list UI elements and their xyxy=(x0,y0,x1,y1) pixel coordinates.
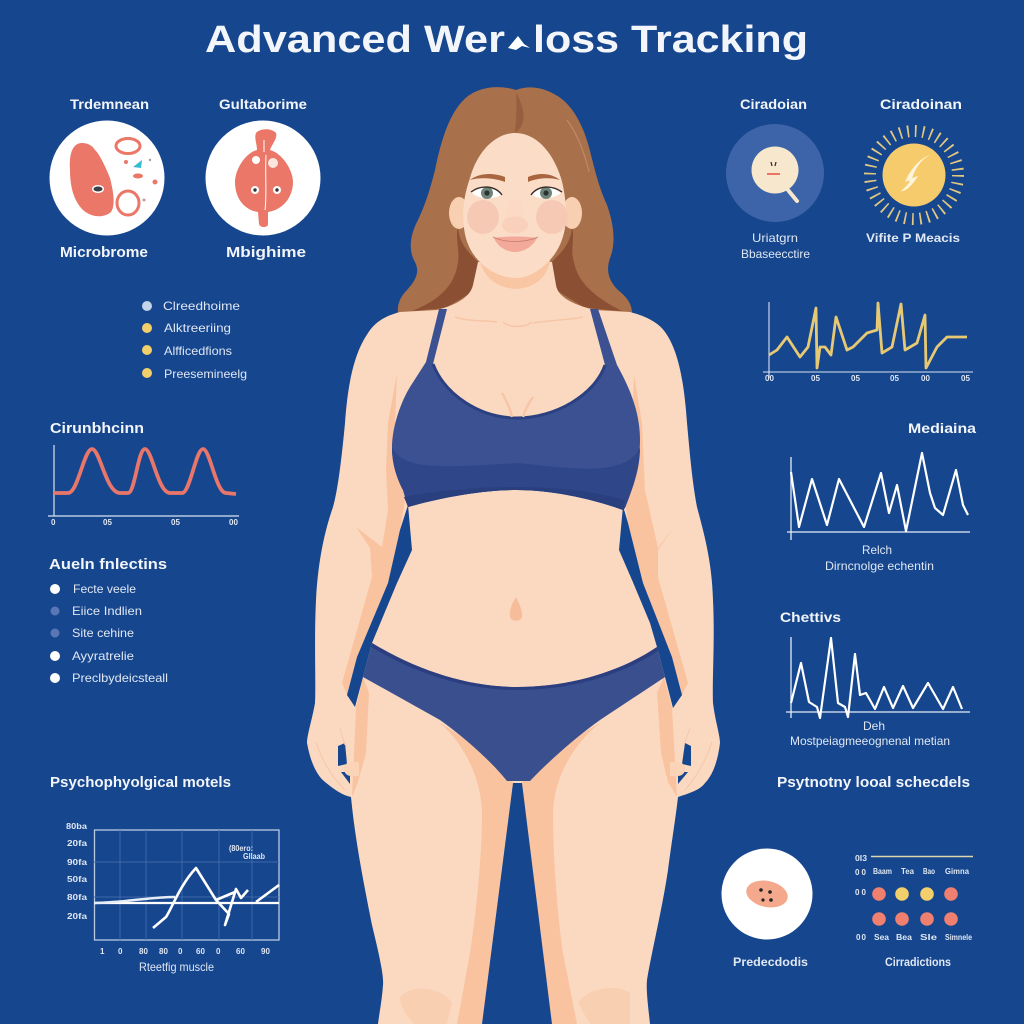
panel: Psychophyolgical motels chart: 0 xyxy=(178,947,183,956)
eyebrows xyxy=(470,174,505,182)
body silhouette xyxy=(307,262,720,1024)
arm shadow right xyxy=(625,375,688,695)
panel: Psychophyolgical motels chart: Gllaab xyxy=(243,852,265,861)
mouth xyxy=(494,236,537,252)
panel: yellow line chart: 05 xyxy=(851,374,860,383)
cheeks xyxy=(467,200,499,234)
schedule dot grid: Sle xyxy=(920,933,938,942)
legend list: Aueln fnlectins: Preclbydeicsteall xyxy=(72,671,168,685)
gap between right arm and torso xyxy=(619,506,682,708)
hand gaps xyxy=(338,743,691,784)
schedule dot grid: 00 xyxy=(855,888,867,897)
label: Uriatgrn: Uriatgrn xyxy=(752,231,798,245)
cleavage xyxy=(502,393,533,417)
legend list: Aueln fnlectins: Ayyratrelie xyxy=(72,649,134,663)
schedule dot grid: Sea xyxy=(874,933,890,942)
central figure xyxy=(307,87,720,1024)
label: Trdemnean: Trdemnean xyxy=(70,96,149,112)
panel: Psychophyolgical motels chart: 80fa xyxy=(67,893,88,902)
panel: Psychophyolgical motels chart: 20fa xyxy=(67,912,88,921)
schedule dot grid xyxy=(855,854,973,942)
legend list: Aueln fnlectins: Fecte veele xyxy=(73,582,136,596)
panel: Psychophyolgical motels chart: 80 xyxy=(139,947,148,956)
schedule dot grid: 00 xyxy=(856,933,867,942)
label: Ciradoian: Ciradoian xyxy=(740,96,807,112)
legend list: metabolic states: Alfficedfions xyxy=(164,344,232,358)
panel: Psytnotny looal schecdels xyxy=(722,774,973,969)
panel: Psychophyolgical motels chart: Psychophyolgical motels xyxy=(50,774,231,791)
panel: Cirunbhcinn wave chart xyxy=(48,421,239,527)
schedule dot grid: Bea xyxy=(896,933,913,942)
schedule dot grid: Simnele xyxy=(945,933,972,942)
panel: Psychophyolgical motels chart: 20fa xyxy=(67,839,88,848)
legend list: Aueln fnlectins: Eiice Indlien xyxy=(72,604,142,618)
gap between left arm and torso xyxy=(347,505,412,707)
thumbs xyxy=(344,762,685,776)
panel: yellow line chart xyxy=(763,302,973,383)
panel: Psychophyolgical motels chart xyxy=(50,774,279,974)
label: Ciradoinan: Ciradoinan xyxy=(880,96,962,112)
panel: Mediaina chart: Relch xyxy=(862,543,892,557)
schedule dot grid: Baam xyxy=(873,867,892,876)
schedule dot grid: 0I3 xyxy=(855,854,868,863)
panel: Mediaina chart xyxy=(787,420,976,573)
navel xyxy=(510,597,522,621)
collarbones xyxy=(455,317,583,326)
title xyxy=(205,19,808,61)
panel: Psychophyolgical motels chart: (80ero: xyxy=(229,844,253,853)
panel: Mediaina chart: Dirncnolge echentin xyxy=(825,559,934,573)
hip shadows xyxy=(352,677,369,797)
label: Vifite P Meacis: Vifite P Meacis xyxy=(866,231,960,245)
panel: Psychophyolgical motels chart: 80ba xyxy=(66,822,88,831)
label: Bbaseecctire: Bbaseecctire xyxy=(741,247,810,261)
panel: yellow line chart: 00 xyxy=(921,374,930,383)
panel: Chettivs chart xyxy=(780,609,970,748)
arm shadow left xyxy=(342,373,405,695)
panel: Cirunbhcinn wave chart: 05 xyxy=(171,518,180,527)
panel: Chettivs chart: Chettivs xyxy=(780,609,841,625)
left eye xyxy=(471,187,502,199)
finger lines xyxy=(316,728,712,790)
panel: Cirunbhcinn wave chart: Cirunbhcinn xyxy=(50,421,144,437)
legend list: Aueln fnlectins: Aueln fnlectins xyxy=(49,556,167,573)
schedule dot grid: 00 xyxy=(855,868,867,877)
panel: Psychophyolgical motels chart: Rteetfig muscle xyxy=(139,960,214,974)
panel: Cirunbhcinn wave chart: 05 xyxy=(103,518,112,527)
right eye xyxy=(531,187,562,199)
icon: sun xyxy=(870,131,958,219)
panel: Psychophyolgical motels chart: 50fa xyxy=(67,875,88,884)
panel: Psychophyolgical motels chart: 1 xyxy=(100,947,105,956)
label: Gultaborime: Gultaborime xyxy=(219,96,307,112)
label: Microbrome: Microbrome xyxy=(60,244,148,261)
panel: Psychophyolgical motels chart: 90fa xyxy=(67,858,88,867)
panel: Chettivs chart: Mostpeiagmeeognenal metian xyxy=(790,734,950,748)
panel: yellow line chart: 00 xyxy=(765,374,774,383)
panel: yellow line chart: 05 xyxy=(811,374,820,383)
briefs xyxy=(363,643,665,781)
icon: tissue circle xyxy=(722,848,812,940)
neck and face xyxy=(449,133,582,278)
panel: Psytnotny looal schecdels: Predecdodis xyxy=(733,955,808,969)
panel: yellow line chart: 05 xyxy=(961,374,970,383)
icon: magnifier on blue disc xyxy=(726,124,824,222)
knees xyxy=(400,988,630,1024)
neck shadow xyxy=(480,260,550,289)
legend list: metabolic states: Alktreeriing xyxy=(164,321,231,335)
panel: yellow line chart: 05 xyxy=(890,374,899,383)
legend list: metabolic states: Preesemineelg xyxy=(164,367,247,381)
inner thigh shadows xyxy=(440,723,513,1024)
schedule dot grid: Gimna xyxy=(945,867,970,876)
panel: Psychophyolgical motels chart: 60 xyxy=(196,947,205,956)
panel: circadian icons top right xyxy=(726,96,962,261)
label: Mbighime: Mbighime xyxy=(226,244,306,261)
panel: Chettivs chart: Deh xyxy=(863,719,885,733)
title: Advanced Wer xyxy=(205,19,505,61)
schedule dot grid: Tea xyxy=(901,867,915,876)
legend list: Aueln fnlectins: Site cehine xyxy=(72,626,134,640)
panel: Psychophyolgical motels chart: 0 xyxy=(216,947,221,956)
gap between legs xyxy=(482,783,552,1024)
legend list: Aueln fnlectins xyxy=(49,556,168,685)
nose xyxy=(502,200,528,234)
panel: Psychophyolgical motels chart: 90 xyxy=(261,947,270,956)
schedule dot grid: Bao xyxy=(923,867,935,876)
sports bra xyxy=(392,309,640,510)
panel: Psychophyolgical motels chart: 80 xyxy=(159,947,168,956)
title: loss Tracking xyxy=(533,19,808,61)
icon: microbiome circle xyxy=(50,120,164,236)
panel: Psytnotny looal schecdels: Psytnotny looal schecdels xyxy=(777,774,970,791)
panel: Mediaina chart: Mediaina xyxy=(908,420,976,436)
legend list: metabolic states xyxy=(142,299,247,381)
panel: top-left organ icons xyxy=(50,96,320,261)
panel: Psytnotny looal schecdels: Cirradictions xyxy=(885,955,951,969)
hair xyxy=(398,87,632,313)
panel: Cirunbhcinn wave chart: 00 xyxy=(229,518,238,527)
panel: Cirunbhcinn wave chart: 0 xyxy=(51,518,56,527)
icon: gut organ circle xyxy=(206,120,320,236)
panel: Psychophyolgical motels chart: 60 xyxy=(236,947,245,956)
legend list: metabolic states: Clreedhoime xyxy=(163,299,240,313)
panel: Psychophyolgical motels chart: 0 xyxy=(118,947,123,956)
